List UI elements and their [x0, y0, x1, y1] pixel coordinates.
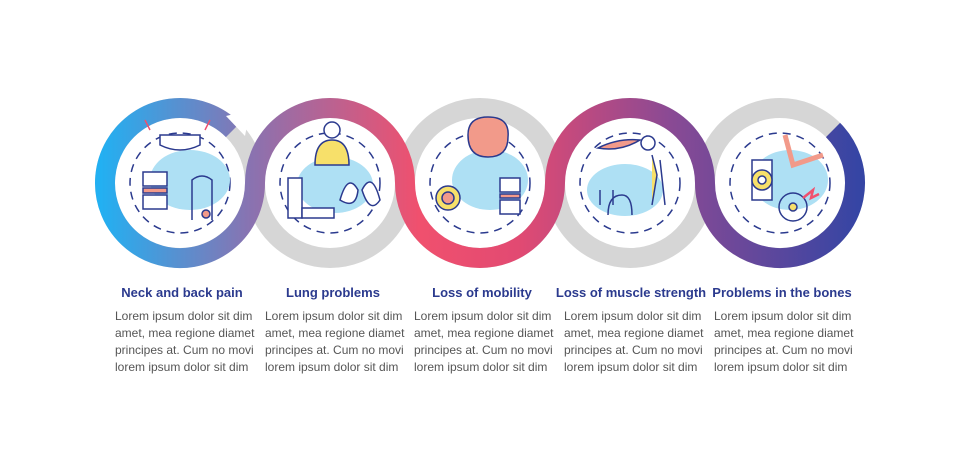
arrow notch [226, 110, 250, 136]
icon: bones [730, 133, 830, 233]
icon: muscle strength [580, 133, 680, 233]
gradient ribbon [105, 108, 855, 258]
title: Neck and back pain: Neck and back pain [121, 285, 243, 300]
text block 5: Lorem ipsum dolor sit dim amet, mea regione diamet principes at. Cum no movi lorem ipsum dolor sit dim [714, 309, 853, 374]
title: Problems in the bones: Problems in the bones [712, 285, 852, 300]
title: Lung problems: Lung problems [286, 285, 380, 300]
icon: lungs [280, 122, 380, 233]
icon: mobility [430, 117, 530, 233]
icon: neck and back [130, 120, 230, 233]
text block 3: Lorem ipsum dolor sit dim amet, mea regione diamet principes at. Cum no movi lorem ipsum dolor sit dim [414, 309, 553, 374]
text block 4: Lorem ipsum dolor sit dim amet, mea regione diamet principes at. Cum no movi lorem ipsum dolor sit dim [564, 309, 703, 374]
text block 1: Lorem ipsum dolor sit dim amet, mea regione diamet principes at. Cum no movi lorem ipsum dolor sit dim [115, 309, 254, 374]
text block 2: Lorem ipsum dolor sit dim amet, mea regione diamet principes at. Cum no movi lorem ipsum dolor sit dim [265, 309, 404, 374]
title: Loss of muscle strength: Loss of muscle strength [556, 285, 706, 300]
title: Loss of mobility: Loss of mobility [432, 285, 532, 300]
